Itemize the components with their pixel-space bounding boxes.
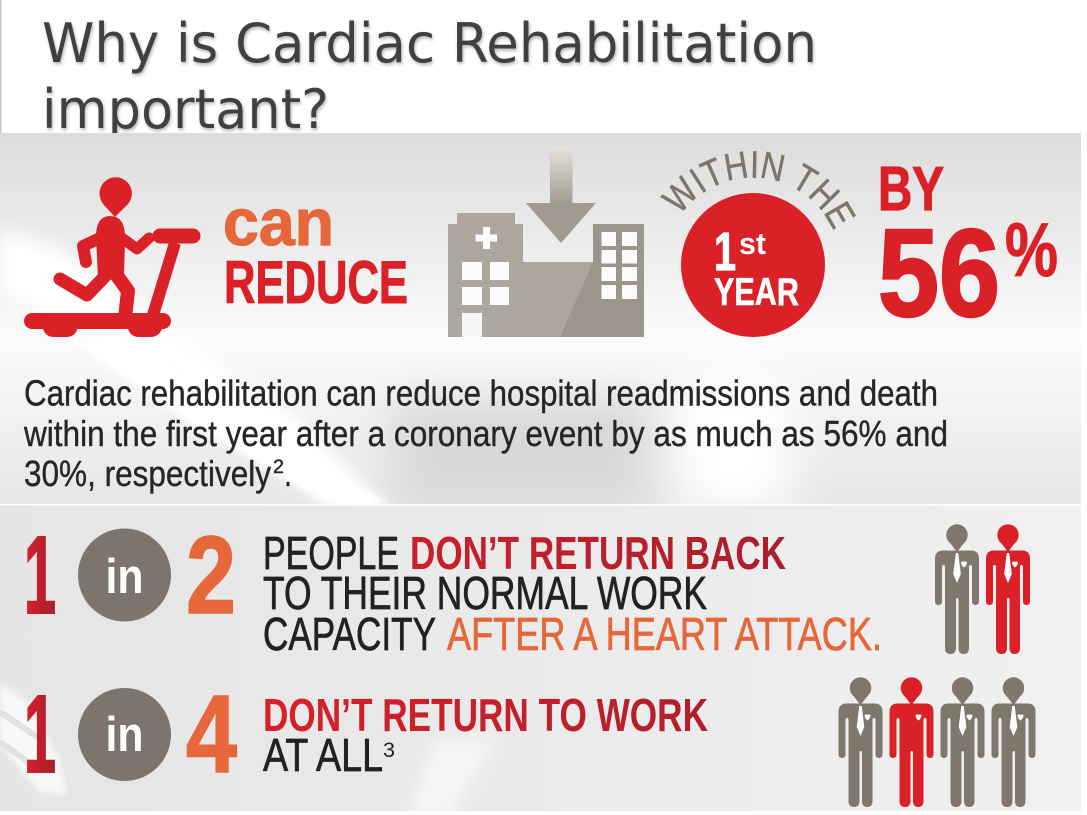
text: by 56%: BY <box>878 155 944 224</box>
icon: four men, one red <box>838 677 1036 807</box>
text: within the (curved): WITHIN THE <box>660 151 856 230</box>
statistic: 1 in 2: in <box>106 550 144 604</box>
text: people don't return back: TO THEIR NORMAL WORK <box>263 567 707 619</box>
icon: runner on treadmill <box>24 177 193 337</box>
statistic: 1 in 2 <box>24 514 236 637</box>
statistic: 1 in 4: 1 <box>24 673 56 796</box>
text: can: can <box>223 185 334 259</box>
panel: hospital readmissions <box>0 133 1081 504</box>
text: don't return to work at all: DON’T RETURN TO WORK <box>263 689 708 741</box>
panel: return to work <box>0 506 1081 815</box>
title: important? <box>42 78 329 141</box>
text: don't return to work at all: AT ALL <box>263 729 383 781</box>
text: description paragraph: within the first year after a coronary event by as much as 56% and <box>23 413 948 454</box>
statistic: 1 in 2: 1 <box>24 514 56 637</box>
text: by 56%: % <box>1005 208 1058 293</box>
text: description paragraph: . <box>284 453 292 494</box>
text: people don't return back: PEOPLE <box>263 527 399 579</box>
text: description paragraph: 30%, respectively <box>24 453 271 494</box>
text: by 56%: 56 <box>878 205 1000 343</box>
icon: two men, one red <box>935 524 1030 654</box>
badge: 1st year: st <box>739 226 766 261</box>
text: description paragraph <box>23 372 948 494</box>
text: description paragraph: 2 <box>273 457 284 478</box>
text: people don't return back: AFTER A HEART ATTACK. <box>447 608 882 660</box>
text: REDUCE: REDUCE <box>224 249 408 316</box>
text: people don't return back: DON’T RETURN BACK <box>410 527 786 579</box>
text: description paragraph: Cardiac rehabilitation can reduce hospital readmissions and death <box>24 372 938 414</box>
statistic: 1 in 4: in <box>106 708 144 762</box>
statistic: 1 in 4: 4 <box>186 673 237 796</box>
statistic: 1 in 2: 2 <box>186 514 236 637</box>
text: by 56% <box>878 155 1058 343</box>
badge: 1st year: YEAR <box>714 271 799 314</box>
badge: 1st year <box>681 193 825 337</box>
title <box>42 12 817 141</box>
text: don't return to work at all: 3 <box>383 739 395 762</box>
text: don't return to work at all <box>263 689 708 781</box>
icon: hospital with down arrow <box>448 147 644 337</box>
title: Why is Cardiac Rehabilitation <box>42 12 817 75</box>
statistic: 1 in 4 <box>24 673 237 796</box>
text: people don't return back: CAPACITY <box>263 608 436 660</box>
text: people don't return back <box>263 527 882 660</box>
badge: 1st year: 1 <box>714 222 736 282</box>
